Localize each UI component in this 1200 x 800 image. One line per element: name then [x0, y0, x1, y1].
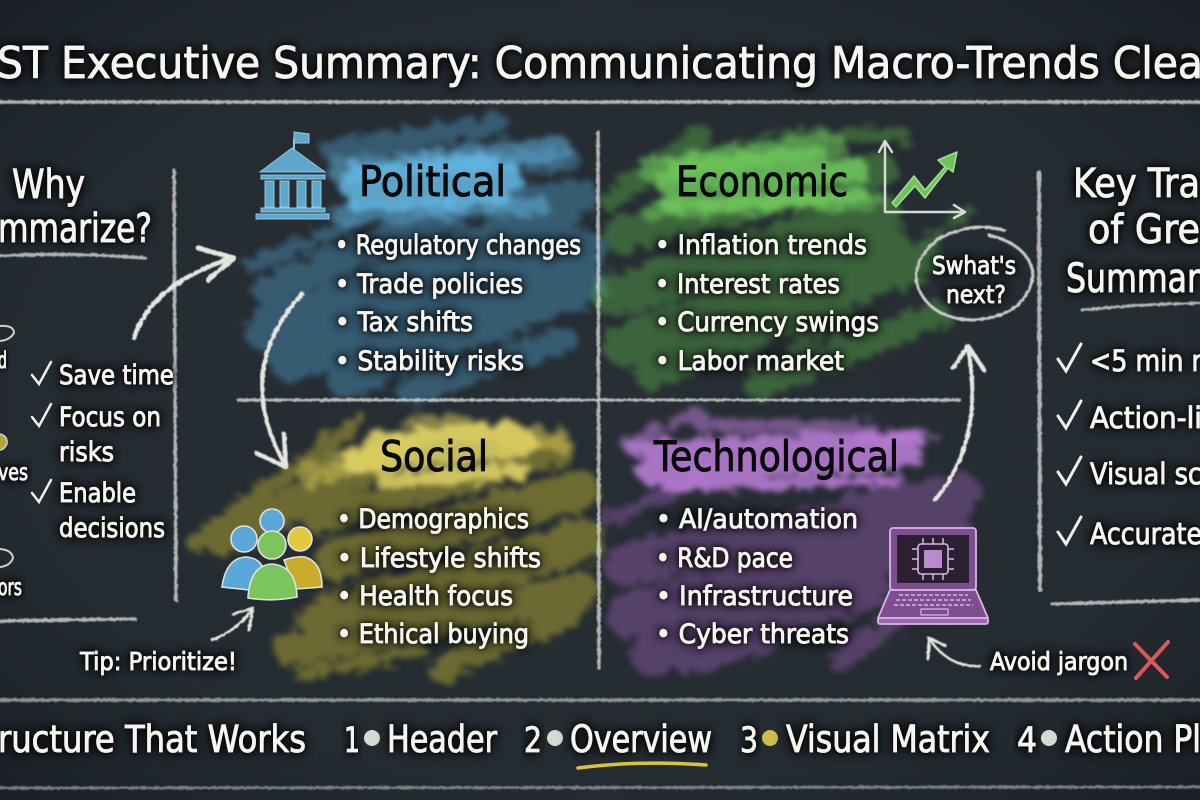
- step 3: visual matrix: 3: [740, 721, 758, 761]
- step 2: overview: Overview: [570, 718, 712, 761]
- right panel: key traits: [1058, 161, 1200, 551]
- step 2: overview: 2: [524, 721, 542, 761]
- list: political factors: • Trade policies: [335, 269, 523, 300]
- list: technological factors: • Infrastructure: [656, 581, 853, 612]
- panel: social: [222, 432, 541, 650]
- checklist: benefits: Save time: [59, 360, 174, 391]
- arrow: political to social: [256, 294, 302, 467]
- callout: avoid jargon: Avoid jargon: [990, 647, 1128, 676]
- list: economic factors: • Labor market: [655, 346, 844, 377]
- chalk smudge: blue: [250, 125, 588, 392]
- checklist: benefits: decisions: [59, 513, 165, 544]
- heading: technological: Technological: [653, 432, 899, 481]
- panel: economic: [655, 141, 965, 377]
- step 1: header: [344, 718, 498, 761]
- icon: government building: [256, 132, 329, 219]
- list: technological factors: • R&D pace: [656, 543, 793, 574]
- list: political factors: [335, 230, 581, 377]
- heading: social: Social: [380, 432, 488, 481]
- cropped side icons and labels: [0, 326, 28, 601]
- list: technological factors: • Cyber threats: [656, 619, 849, 650]
- arrow: tip to people: [212, 608, 253, 640]
- chalk smudge: green: [610, 135, 968, 385]
- checklist: benefits: risks: [59, 437, 114, 468]
- checklist: traits: [1058, 344, 1200, 551]
- icon: growth chart: [879, 141, 965, 218]
- list: technological factors: • AI/automation: [656, 504, 858, 535]
- chalk smudge: purple: [606, 412, 960, 668]
- list: social factors: • Ethical buying: [337, 619, 529, 650]
- step 4: action plan: 4: [1017, 721, 1037, 761]
- heading: why summarize: mmarize?: [0, 206, 152, 252]
- callout: what's next: [916, 227, 1033, 320]
- list: technological factors: [656, 504, 858, 650]
- list: political factors: • Stability risks: [335, 346, 524, 377]
- icon: laptop with chip: [878, 528, 988, 624]
- list: social factors: • Demographics: [337, 504, 529, 535]
- callout: what's next: next?: [946, 280, 1006, 309]
- list: economic factors: • Inflation trends: [655, 230, 867, 261]
- step 3: visual matrix: Visual Matrix: [786, 718, 990, 761]
- list: social factors: • Health focus: [337, 581, 513, 612]
- heading: political: Political: [359, 157, 506, 206]
- list: political factors: • Regulatory changes: [335, 230, 581, 261]
- chalk smudge: yellow: [194, 420, 582, 675]
- arrow: why to political: [134, 248, 234, 338]
- list: political factors: • Tax shifts: [335, 307, 473, 338]
- icon: people group: [222, 509, 322, 600]
- list: economic factors: • Currency swings: [655, 307, 879, 338]
- heading: economic: Economic: [676, 157, 848, 206]
- step 2: overview: [524, 718, 712, 768]
- panel: technological: [653, 432, 988, 650]
- step 1: header: 1: [344, 721, 360, 761]
- callout: tip prioritize: Tip: Prioritize!: [79, 647, 237, 676]
- heading: why summarize: [0, 162, 152, 252]
- heading: why summarize: Why: [12, 162, 85, 208]
- heading: key traits: [1066, 161, 1200, 302]
- arrow: avoid jargon to laptop: [928, 638, 980, 666]
- panel: political: [256, 132, 581, 377]
- list: social factors: • Lifestyle shifts: [337, 543, 541, 574]
- footer: structure that works: [0, 718, 1200, 768]
- label: structure: ructure That Works: [0, 718, 306, 761]
- arrow: technological to what's next: [935, 346, 984, 500]
- list: economic factors: [655, 230, 879, 377]
- checklist: benefits: Focus on: [59, 402, 161, 433]
- callout: what's next: Swhat's: [932, 251, 1016, 280]
- checklist: benefits: Enable: [59, 478, 136, 509]
- list: social factors: [337, 504, 541, 650]
- step 1: header: Header: [387, 718, 498, 761]
- list: economic factors: • Interest rates: [655, 269, 840, 300]
- left panel: why summarize: [0, 162, 174, 601]
- checklist: benefits: [32, 360, 174, 544]
